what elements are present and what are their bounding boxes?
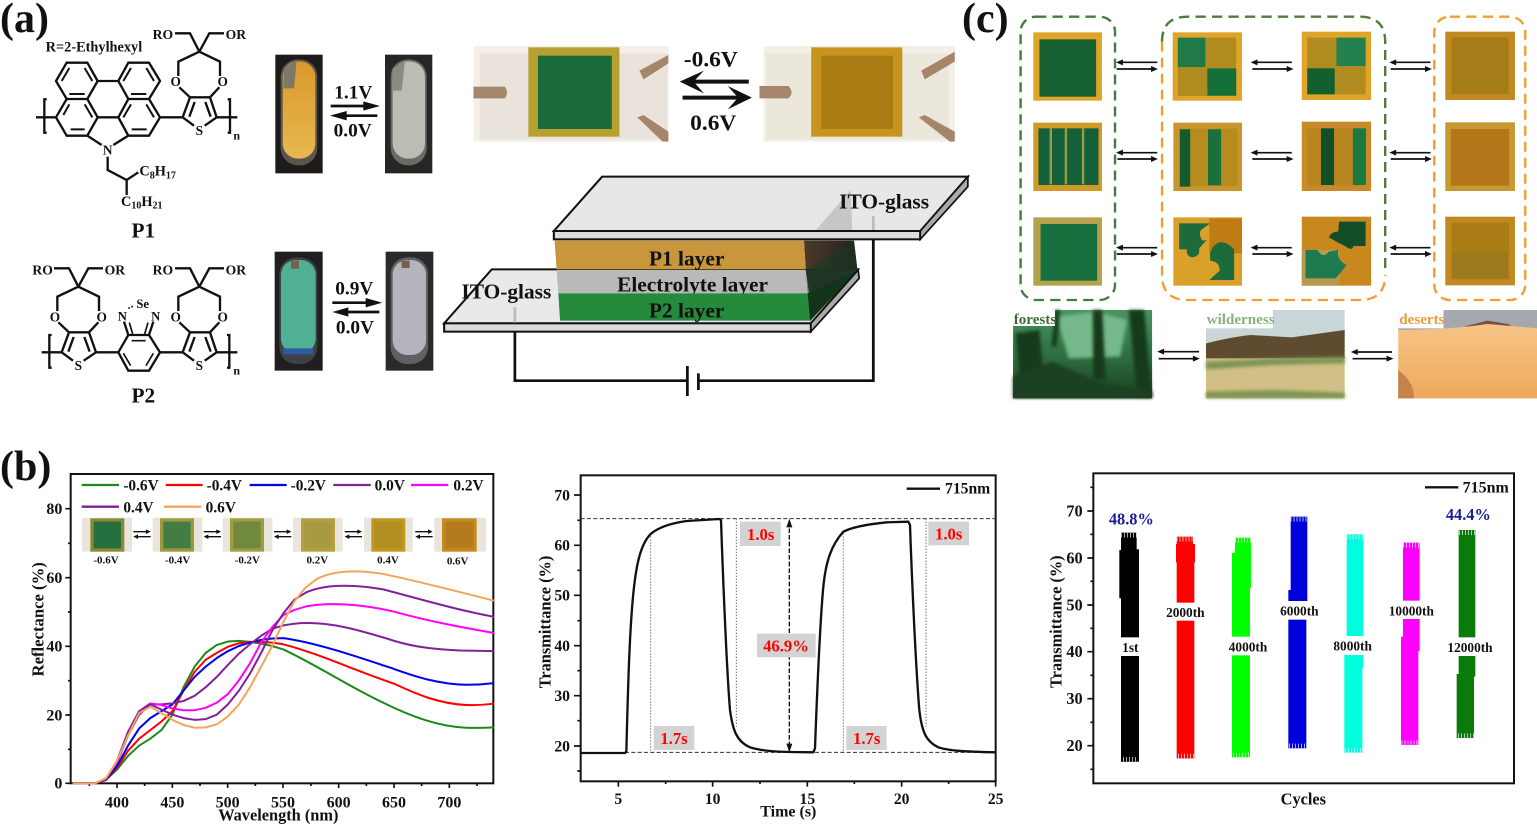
axes and labels: 600	[327, 794, 351, 811]
device: stripes 2	[1302, 122, 1371, 191]
chemical structure P1: n	[233, 128, 240, 142]
thumbnails: 0.2V	[306, 555, 328, 567]
chemical structure P2: P2	[131, 384, 155, 408]
device: desert 2	[1445, 122, 1515, 191]
landscape: deserts	[1398, 310, 1537, 398]
switching arrows -0.6V / 0.6V: 0.6V	[690, 109, 737, 135]
axis labels: Transmittance (%)	[1047, 555, 1066, 688]
panel a: molecules and vials	[32, 27, 433, 408]
exchange arrows	[1116, 59, 1432, 362]
switching arrows -0.6V / 0.6V: -0.6V	[684, 46, 738, 72]
chemical structure P1: H	[141, 194, 152, 210]
axis labels: Cycles	[1281, 789, 1326, 808]
spectral curves	[73, 571, 494, 783]
device: stripes green	[1033, 123, 1102, 191]
device: desert 3	[1445, 217, 1515, 285]
chemical structure P2: O	[96, 310, 107, 325]
chemical structure P1: S	[196, 123, 203, 138]
chart: response time	[536, 475, 1004, 821]
vial P1 orange	[275, 55, 323, 173]
vial P2 teal	[275, 252, 323, 371]
chemical structure P2	[32, 262, 246, 408]
cycle bars with labels: 12000th	[1447, 640, 1493, 655]
landscape: forests: forests	[1014, 312, 1056, 328]
ITO-glass labels: ITO-glass	[839, 190, 929, 214]
axis labels: 25	[988, 791, 1004, 808]
chemical structure P2: O	[50, 310, 60, 325]
chart: cycling stability	[1047, 473, 1514, 808]
thumbnails: -0.6V	[93, 555, 119, 567]
legend	[907, 480, 990, 497]
legend: -0.4V	[207, 478, 242, 495]
efficiency labels: 48.8%	[1109, 509, 1154, 528]
arrows 1.1V / 0.0V: 1.1V	[334, 82, 372, 103]
axis labels: 20	[1066, 736, 1083, 755]
landscape: wilderness: wilderness	[1207, 312, 1275, 328]
chemical structure P2: n	[233, 364, 240, 378]
P2 layer: P2 layer	[649, 299, 724, 322]
axes and labels: 40	[46, 639, 62, 656]
landscape: forests	[1013, 310, 1152, 398]
P1 layer	[555, 241, 806, 271]
axes and labels: 0	[54, 776, 62, 793]
axes	[1093, 473, 1514, 783]
axis labels: 50	[1066, 595, 1083, 614]
axes and labels	[28, 474, 493, 825]
chemical structure P2: Se	[136, 297, 149, 311]
axis labels: 70	[1066, 501, 1083, 520]
axes and labels: 20	[46, 707, 62, 724]
ITO-glass labels: ITO-glass	[461, 280, 551, 303]
axis labels: 40	[1066, 642, 1083, 661]
axes and labels: 450	[160, 794, 184, 811]
device: checker 2	[1302, 32, 1371, 100]
axis labels: 70	[554, 487, 570, 504]
axis labels: 10	[705, 791, 721, 808]
device: checker 1	[1173, 32, 1242, 101]
axes and labels: 60	[46, 570, 62, 587]
annotations: 1.7s	[660, 729, 688, 748]
axis labels: 20	[894, 791, 910, 808]
cycle bars with labels: 6000th	[1280, 604, 1319, 619]
axis labels: 5	[614, 791, 622, 808]
chemical structure P1: C	[139, 164, 150, 180]
axis labels: 15	[800, 791, 815, 808]
chemical structure P2: O	[170, 310, 181, 325]
chemical structure P1: RO	[153, 27, 173, 42]
P2 layer	[558, 293, 810, 322]
thumbnails: 0.6V	[447, 555, 469, 567]
axis labels	[1047, 501, 1326, 808]
chemical structure P1: H	[155, 164, 166, 180]
legend: -0.2V	[291, 478, 326, 495]
chemical structure P1: N	[103, 143, 113, 158]
axis labels: 30	[554, 688, 570, 705]
chemical structure P2: RO	[153, 262, 173, 277]
dashed box wilderness	[1162, 17, 1385, 300]
device: desert 1	[1445, 32, 1515, 100]
axes and labels: 550	[271, 794, 295, 811]
device: stripes 1	[1173, 123, 1242, 191]
chemical structure P1: R=2-Ethylhexyl	[46, 40, 142, 56]
transmittance curve	[581, 519, 996, 753]
P1 layer: P1 layer	[649, 247, 724, 271]
legend	[82, 478, 484, 516]
thumbnails: 0.4V	[377, 554, 399, 566]
device photo yellow state	[759, 46, 955, 142]
chemical structure P1	[36, 27, 246, 242]
chemical structure P1: 8	[150, 170, 155, 181]
axis labels: Time (s)	[760, 804, 816, 821]
thumbnails: -0.2V	[235, 555, 260, 567]
chemical structure P2: OR	[226, 262, 246, 277]
legend: 0.4V	[123, 499, 154, 516]
chemical structure P1: 10	[131, 201, 141, 212]
efficiency labels: 44.4%	[1446, 505, 1491, 524]
cycle bars with labels: 8000th	[1333, 639, 1373, 654]
axes and labels: 80	[46, 501, 62, 518]
chemical structure P2: OR	[105, 262, 125, 277]
landscape: wilderness	[1206, 310, 1345, 398]
ITO-glass labels	[461, 190, 929, 303]
guide lines	[581, 519, 996, 752]
chemical structure P1: O	[170, 74, 181, 89]
panel c: patterned devices and landscapes	[1013, 17, 1537, 398]
annotations: 1.7s	[853, 729, 881, 748]
axes and labels: 400	[105, 794, 129, 811]
dashed box forests	[1021, 17, 1115, 300]
device: puzzle green	[1033, 217, 1102, 286]
chemical structure P1: C	[121, 194, 131, 210]
chemical structure P1: O	[217, 74, 228, 89]
arrows 0.9V / 0.0V: 0.0V	[336, 317, 374, 338]
annotations: 1.0s	[935, 524, 963, 543]
axes	[581, 475, 996, 781]
device stack schematic	[444, 177, 968, 396]
device: puzzle 1	[1173, 217, 1242, 286]
axis labels	[536, 487, 1004, 821]
legend: 0.2V	[453, 478, 484, 495]
arrows 1.1V / 0.0V: 0.0V	[334, 121, 372, 142]
cycle bars with labels: 10000th	[1389, 603, 1435, 618]
vial P2 gray	[386, 252, 433, 371]
chart: reflectance spectra	[28, 474, 494, 825]
legend	[1425, 479, 1510, 496]
legend: 715nm	[945, 480, 990, 497]
chemical structure P1: P1	[131, 218, 155, 242]
arrows 0.9V / 0.0V: 0.9V	[335, 278, 373, 299]
device: puzzle 2	[1302, 217, 1371, 286]
chemical structure P2: S	[75, 358, 82, 373]
legend: 0.6V	[206, 499, 236, 516]
switching arrows -0.6V / 0.6V	[680, 46, 752, 135]
vial P1 gray	[385, 55, 432, 173]
efficiency labels	[1109, 505, 1491, 528]
legend: 715nm	[1463, 479, 1510, 496]
chemical structure P1: 17	[166, 170, 176, 181]
chemical structure P2: S	[196, 358, 203, 373]
arrows 1.1V / 0.0V	[330, 82, 380, 142]
legend and thumbnails	[82, 478, 486, 567]
axis labels: 30	[1066, 689, 1083, 708]
thumbnails: -0.4V	[165, 554, 190, 566]
arrows 0.9V / 0.0V	[332, 278, 382, 338]
axis labels: 20	[554, 738, 570, 755]
axis labels: 40	[554, 638, 570, 655]
chemical structure P2: RO	[32, 262, 53, 277]
panel label: (b): (b)	[0, 444, 51, 490]
axes and labels: 500	[216, 794, 240, 811]
annotations: 1.0s	[747, 525, 775, 544]
cycle bars with labels: 4000th	[1229, 639, 1268, 654]
cycle bars with labels: 1st	[1122, 640, 1139, 655]
chemical structure P1: OR	[226, 27, 246, 42]
device: solid green	[1033, 32, 1102, 101]
axes and labels: Reflectance (%)	[28, 562, 47, 676]
axes and labels: Wavelength (nm)	[218, 806, 338, 825]
contrast arrow	[786, 519, 792, 752]
dashed box deserts	[1434, 17, 1525, 300]
axes and labels: 650	[382, 794, 406, 811]
annotations	[654, 522, 969, 750]
axis labels: 60	[554, 538, 570, 555]
thumbnails	[82, 518, 486, 567]
device photo green state	[473, 46, 668, 142]
chemical structure P2: N	[151, 309, 160, 323]
panel a: device photos and stack	[444, 46, 968, 396]
circuit with battery	[515, 216, 873, 396]
landscape: deserts: deserts	[1399, 312, 1445, 328]
annotations: 46.9%	[763, 637, 809, 656]
cycle bars with labels: 2000th	[1166, 605, 1205, 620]
axis labels: 50	[554, 588, 570, 605]
axis labels: 60	[1066, 548, 1083, 567]
legend: -0.6V	[123, 478, 159, 495]
axes and labels: 700	[437, 794, 461, 811]
axis labels: Transmittance (%)	[536, 556, 555, 688]
cycle bars with labels	[1119, 517, 1494, 762]
chemical structure P2: N	[118, 309, 127, 323]
electrolyte layer	[557, 270, 807, 297]
electrolyte layer: Electrolyte layer	[617, 273, 768, 297]
legend: 0.0V	[375, 478, 405, 495]
chemical structure P2: O	[217, 310, 228, 325]
chemical structure P1: 21	[152, 201, 162, 212]
